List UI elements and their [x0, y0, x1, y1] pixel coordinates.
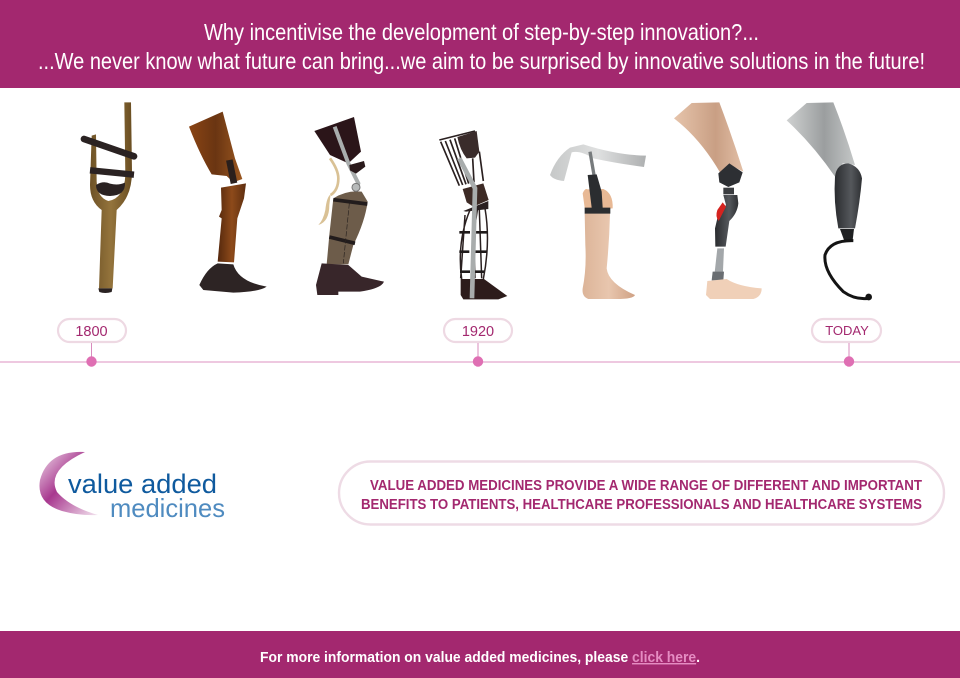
timeline marker: 1920	[444, 319, 512, 367]
logo wordmark: medicines	[110, 493, 225, 523]
illustration: metal frame leg	[439, 131, 507, 299]
timeline marker: 1920: 1920	[462, 324, 494, 340]
illustration: leather leg with shoe	[189, 112, 267, 293]
callout: benefits message	[339, 462, 944, 524]
timeline	[0, 319, 960, 367]
illustration: grey socket with running blade	[787, 102, 872, 300]
logo swoosh	[39, 452, 98, 515]
timeline marker: 1800	[58, 319, 126, 367]
illustration: skin-tone leg with grey strap	[550, 144, 646, 299]
timeline marker: 1800: 1800	[75, 324, 108, 340]
callout: benefits message: VALUE ADDED MEDICINES PROVIDE A WIDE RANGE OF DIFFERENT AND IMPORTANT	[370, 478, 922, 494]
header title text: Why incentivise the development of step-by-step innovation?...	[204, 19, 759, 45]
timeline marker: today: TODAY	[825, 323, 869, 338]
timeline marker: today	[812, 319, 881, 367]
logo: value added medicines	[39, 452, 225, 523]
footer text with link: For more information on value added medicines, please click here.	[260, 650, 700, 666]
header banner	[0, 0, 960, 88]
logo wordmark	[68, 469, 225, 523]
header title text	[38, 19, 925, 74]
footer banner	[0, 631, 960, 678]
callout: benefits message: BENEFITS TO PATIENTS, HEALTHCARE PROFESSIONALS AND HEALTHCARE SYSTEMS	[361, 497, 922, 513]
illustration: microprocessor knee with cosmetic foot	[674, 102, 762, 299]
illustration: leg with boot and straps	[314, 117, 384, 295]
illustration: wooden peg leg	[84, 102, 134, 293]
logo wordmark: value added	[68, 469, 217, 499]
